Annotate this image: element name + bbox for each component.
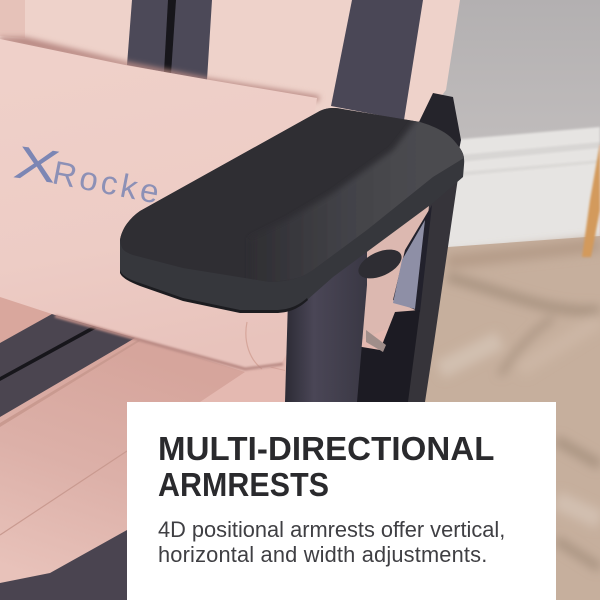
backrest pink panels [0,0,460,130]
skirting board [440,127,600,252]
lower mechanism [350,310,420,402]
bracket strut [385,178,458,402]
upper seat piece [0,297,52,343]
lever disc [354,244,406,284]
title: MULTI-DIRECTIONAL [158,430,495,467]
dark stripes on seat back [127,0,212,80]
rear bracket top [418,93,461,170]
seat lower dark corner [0,530,127,600]
pillow under-shadow [55,316,283,369]
seat base [0,296,285,600]
title: ARMRESTS [158,466,329,503]
right dark stripe [331,0,423,120]
room wall [430,0,600,145]
armrest pad bottom edge [120,270,308,313]
body text: horizontal and width adjustments. [158,542,487,567]
silver plate [393,220,425,309]
backrest left side panel [0,0,25,38]
seat strap [0,314,140,427]
shadow above lumbar pillow [0,37,320,102]
logo: XRocke: Rocke [50,154,166,211]
seat right section [133,337,290,402]
white text card [127,402,556,600]
pink seen between column and strut [350,190,435,345]
armrest column [285,240,367,402]
armrest pad top surface [120,108,464,282]
armrest pad lit band [281,121,464,280]
wooden floor [420,236,600,600]
lumbar pillow [0,39,317,369]
pillow seam [246,322,262,369]
body text: 4D positional armrests offer vertical, [158,517,505,542]
logo: XRocke: X [10,136,64,193]
bracket inner panel [393,205,432,312]
wooden chair leg [582,143,600,257]
logo: XRocke [10,136,166,211]
title [158,430,495,503]
seat seam [0,451,127,535]
armrest pad side rim [120,108,464,312]
body text [158,517,505,567]
